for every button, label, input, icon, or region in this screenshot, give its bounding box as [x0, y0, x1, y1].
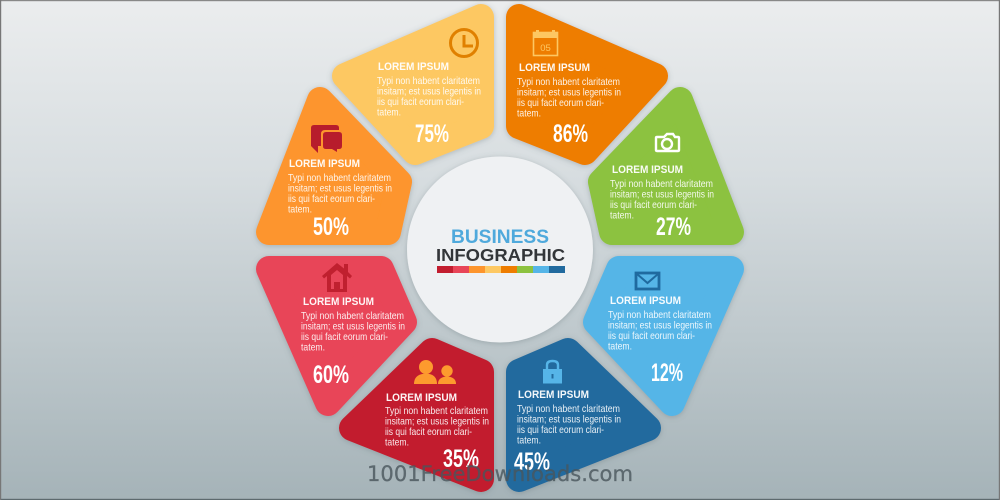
percentage: 50% — [313, 213, 349, 241]
panel heading: LOREM IPSUM — [518, 389, 589, 401]
panel body text: tatem. — [608, 342, 632, 352]
icon: chat bubbles — [311, 125, 342, 153]
icon: lock — [543, 361, 562, 384]
percentage: 60% — [313, 361, 349, 389]
panel body text: insitam; est usus legentis in — [608, 320, 712, 332]
icon: house — [322, 263, 352, 292]
panel body text: Typi non habent claritatem — [377, 76, 480, 87]
panel body text: Typi non habent claritatem — [288, 173, 391, 184]
panel heading: LOREM IPSUM — [519, 62, 590, 74]
icon: people — [414, 360, 456, 384]
panel body text — [517, 404, 621, 446]
panel body text: iis qui facit eorum clari- — [385, 427, 472, 438]
panel body text: insitam; est usus legentis in — [288, 184, 392, 194]
panel shape — [601, 100, 731, 232]
panel body text: tatem. — [377, 108, 401, 118]
panel body text — [610, 179, 714, 222]
panel: dark red 35% — [352, 351, 489, 479]
panel body text — [517, 77, 621, 120]
percentage: 45% — [514, 448, 550, 476]
panel heading: LOREM IPSUM — [610, 295, 681, 307]
panel shape — [519, 17, 655, 152]
panel heading: LOREM IPSUM — [289, 158, 360, 170]
panel body text: insitam; est usus legentis in — [385, 416, 489, 428]
panel body text: iis qui facit eorum clari- — [608, 331, 695, 342]
icon: calendar: 05 — [540, 43, 551, 54]
panel body text — [385, 406, 489, 448]
panel body text: Typi non habent claritatem — [385, 406, 488, 417]
panel: green 27% — [601, 100, 731, 241]
panel body text: tatem. — [385, 438, 409, 448]
percentage: 12% — [651, 359, 683, 387]
panel body text: Typi non habent claritatem — [301, 311, 404, 322]
panel body text: iis qui facit eorum clari- — [288, 194, 375, 205]
watermark: 1001FreeDownloads.com — [367, 462, 633, 486]
panel body text: tatem. — [517, 108, 541, 120]
panel body text — [608, 310, 712, 352]
icon: clock — [450, 30, 478, 56]
title: infographic: INFOGRAPHIC — [436, 245, 565, 265]
panel body text — [377, 76, 481, 118]
panel body text: tatem. — [301, 342, 325, 354]
panel body text: tatem. — [288, 204, 312, 216]
panel body text: insitam; est usus legentis in — [377, 86, 481, 98]
panel shape — [352, 351, 481, 479]
panel: dark orange 86% — [517, 17, 655, 152]
panel body text: insitam; est usus legentis in — [517, 414, 621, 426]
percentage: 35% — [443, 445, 479, 473]
colour bar — [437, 266, 565, 273]
panel body text: iis qui facit eorum clari- — [610, 200, 697, 211]
panel body text: insitam; est usus legentis in — [517, 88, 621, 98]
panel heading: LOREM IPSUM — [386, 392, 457, 404]
panel body text: tatem. — [517, 436, 541, 446]
panel: yellow 75% — [345, 17, 481, 152]
percentage: 86% — [553, 120, 588, 148]
panel body text: Typi non habent claritatem — [517, 77, 620, 88]
panel heading: LOREM IPSUM — [303, 296, 374, 308]
panel heading: LOREM IPSUM — [378, 61, 449, 73]
panel: light blue 12% — [596, 269, 731, 403]
percentage: 75% — [415, 120, 449, 148]
panel shape — [269, 269, 404, 403]
icon: camera — [656, 134, 679, 151]
title: business: BUSINESS — [451, 226, 549, 248]
panel body text: insitam; est usus legentis in — [610, 190, 714, 200]
panel: orange 50% — [269, 100, 399, 241]
icon: envelope — [636, 273, 659, 289]
panel shape — [269, 100, 399, 232]
panel body text: Typi non habent claritatem — [610, 179, 713, 190]
panel body text: Typi non habent claritatem — [608, 310, 711, 321]
panel body text: iis qui facit eorum clari- — [517, 98, 604, 109]
circle background — [407, 156, 593, 342]
panel heading: LOREM IPSUM — [612, 164, 683, 176]
panel: red 60% — [269, 263, 405, 403]
panel body text: insitam; est usus legentis in — [301, 322, 405, 332]
panel shape — [519, 351, 648, 479]
panel body text — [301, 311, 405, 354]
panel body text: iis qui facit eorum clari- — [517, 425, 604, 436]
panel body text: Typi non habent claritatem — [517, 404, 620, 415]
panel body text: iis qui facit eorum clari- — [377, 97, 464, 108]
center circle — [407, 156, 593, 342]
panel body text: tatem. — [610, 210, 634, 222]
percentage: 27% — [656, 213, 691, 241]
panel shape — [596, 269, 731, 403]
panel body text: iis qui facit eorum clari- — [301, 332, 388, 343]
panel: dark blue 45% — [514, 351, 648, 479]
panel body text — [288, 173, 392, 216]
panel shape — [345, 17, 481, 152]
